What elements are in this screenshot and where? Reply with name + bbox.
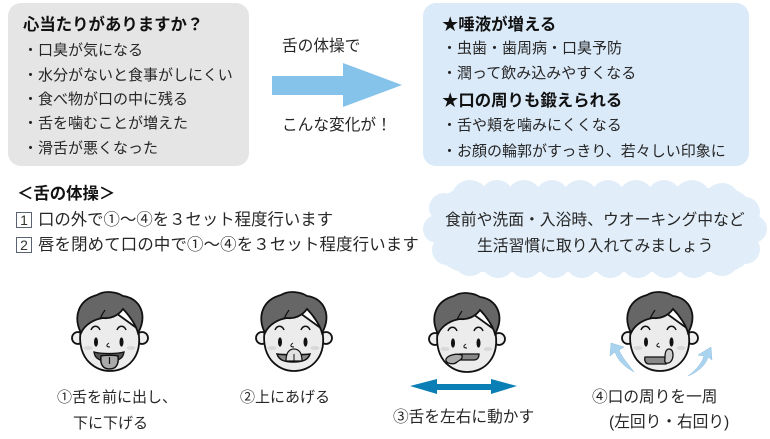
panel: benefits	[423, 3, 749, 166]
text: with tongue exercises: 舌の体操で	[282, 38, 360, 55]
panel: self-check list	[8, 3, 249, 166]
label: step 3: ③舌を左右に動かす	[393, 409, 534, 426]
list item: swallowing: ・潤って飲み込みやすくなる	[442, 65, 636, 82]
heading: tongue exercises: ＜舌の体操＞	[17, 185, 115, 203]
heading: self-check: 心当たりがありますか？	[23, 16, 203, 34]
list item: dry mouth: ・水分がないと食事がしにくい	[23, 67, 233, 84]
cloud text line 1: 食前や洗面・入浴時、ウオーキング中など	[445, 212, 745, 229]
label: step 1 second line: 下に下げる	[73, 415, 148, 432]
heading: more saliva: ★唾液が増える	[442, 16, 556, 34]
list item: prevention: ・虫歯・歯周病・口臭予防	[442, 40, 622, 57]
list item: bad breath: ・口臭が気になる	[23, 42, 143, 59]
label: step 4 second line: (左回り・右回り)	[609, 414, 729, 431]
instruction text 1: 口の外で①〜④を３セット程度行います	[38, 211, 333, 229]
label: step 4: ④口の周りを一周	[592, 389, 718, 406]
list item: biting tongue: ・舌を噛むことが増えた	[23, 115, 188, 132]
list item: articulation: ・滑舌が悪くなった	[23, 140, 158, 157]
list item: less biting: ・舌や頬を噛みにくくなる	[442, 117, 622, 134]
text: such changes: こんな変化が！	[282, 117, 392, 134]
number box 2: 2	[20, 237, 28, 253]
instruction 1	[16, 210, 333, 229]
number box 1: 1	[20, 212, 28, 228]
instruction 2	[16, 236, 419, 254]
cloud text line 2: 生活習慣に取り入れてみましょう	[477, 238, 713, 255]
number box 1	[16, 212, 32, 228]
heading: stronger mouth muscles: ★口の周りも鍛えられる	[442, 92, 622, 110]
list item: facial contour: ・お顔の輪郭がすっきり、若々しい印象に	[442, 143, 726, 160]
number box 2	[16, 237, 32, 253]
list item: food residue: ・食べ物が口の中に残る	[23, 91, 188, 108]
instruction text 2: 唇を閉めて口の中で①〜④を３セット程度行います	[38, 236, 419, 254]
label: step 2: ②上にあげる	[240, 389, 330, 406]
label: step 1: ①舌を前に出し、	[57, 389, 177, 406]
